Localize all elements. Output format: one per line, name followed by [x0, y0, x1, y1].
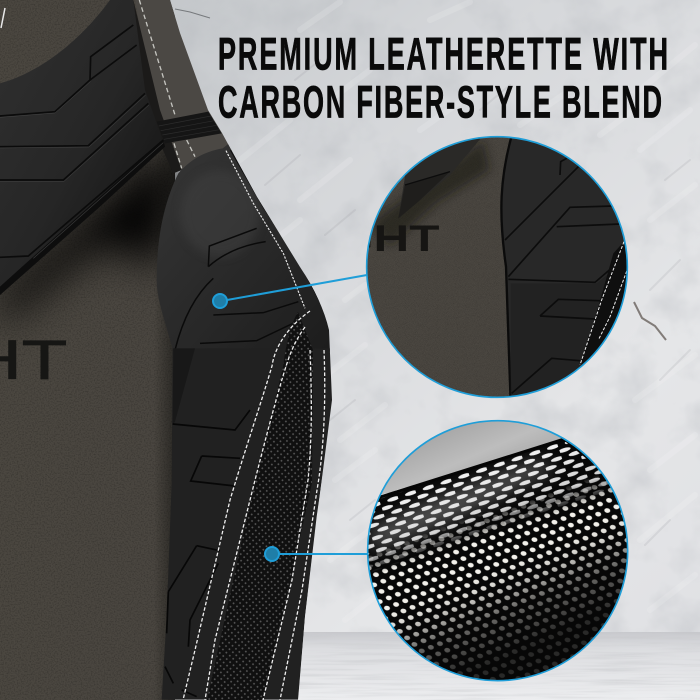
callout dot: carbon fiber — [265, 547, 279, 561]
title: CARBON FIBER-STYLE BLEND — [218, 76, 662, 127]
streak highlights — [368, 442, 608, 572]
dot weave — [368, 476, 627, 680]
lower side bolster — [162, 348, 333, 700]
dark panel at top-left of circle — [400, 138, 480, 205]
stitched edge — [580, 243, 626, 364]
side neck strip with stitching — [128, 0, 233, 173]
leatherette seams — [511, 390, 512, 396]
headrest pillow — [0, 0, 165, 295]
elastic strap — [157, 112, 222, 143]
chair fabric back panel — [0, 0, 175, 700]
fabric logo lettering: GHT — [335, 219, 440, 259]
zoom circle: leatherette and fabric — [366, 136, 628, 398]
glossy highlight band — [370, 460, 557, 550]
callout dot: leatherette — [213, 294, 227, 308]
callout line: leatherette — [227, 275, 367, 300]
small white stitch fragment — [1, 8, 5, 28]
upper side bolster — [157, 140, 337, 352]
leatherette panel — [502, 138, 624, 396]
chair — [0, 0, 337, 700]
white stitching — [183, 311, 325, 700]
carbon fiber-style strip — [207, 312, 313, 700]
zoom circle: carbon fiber weave — [363, 417, 633, 687]
grey top piece — [381, 422, 562, 495]
seam — [378, 439, 563, 498]
callout line: carbon fiber — [279, 553, 367, 555]
headrest shadow on fabric — [0, 147, 178, 325]
title — [218, 28, 668, 127]
title: PREMIUM LEATHERETTE WITH — [218, 28, 668, 79]
